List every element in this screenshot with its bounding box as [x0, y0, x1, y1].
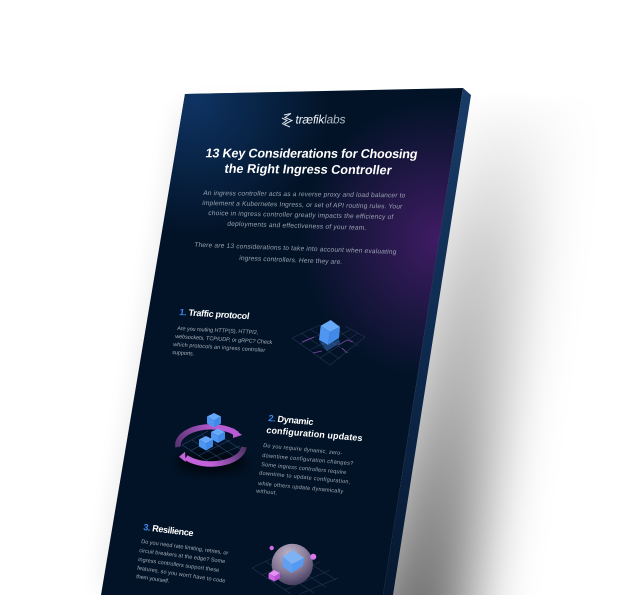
- text 2: while others update dynamically: [257, 481, 344, 495]
- section 1: traffic protocol: [172, 307, 273, 358]
- text 3: ingress controllers support these: [138, 557, 220, 574]
- sphere: [272, 544, 313, 585]
- intro text: deployments and effectiveness of your team.: [227, 221, 367, 232]
- intro text: [194, 190, 406, 266]
- intro text: An ingress controller acts as a reverse proxy and load balancer to: [203, 190, 406, 199]
- heading 2: configuration updates: [266, 425, 363, 443]
- icon: sphere with cube: [252, 544, 338, 594]
- cube in sphere: [283, 550, 304, 573]
- heading 2: 2. Dynamic: [268, 413, 314, 427]
- text 1: websockets, TCP/UDP, or gRPC? Check: [174, 334, 273, 346]
- intro text: choice in ingress controller greatly impacts the efficiency of: [208, 210, 394, 221]
- text 3: circuit breakers at the edge? Some: [139, 548, 226, 565]
- drop shadow: [105, 95, 552, 595]
- cubes: [199, 413, 225, 450]
- text 1: which protocols an ingress controller: [172, 342, 266, 354]
- intro text: ingress controllers. Here they are.: [239, 255, 343, 266]
- text 2: without.: [255, 488, 278, 497]
- text 1: Are you routing HTTP(S), HTTP/2,: [177, 326, 259, 336]
- title: [205, 146, 419, 177]
- infographic book mockup: [101, 88, 556, 595]
- title: the Right Ingress Controller: [224, 162, 393, 177]
- heading 2: [266, 413, 363, 443]
- logo: traefik labs: [282, 112, 347, 127]
- text 2: [255, 443, 354, 497]
- icon: ring of cubes: [176, 413, 248, 475]
- intro text: There are 13 considerations to take into account when evaluating: [194, 242, 397, 256]
- wordmark: træfiklabs: [295, 112, 347, 126]
- title: 13 Key Considerations for Choosing: [205, 146, 419, 161]
- ring arrows: [178, 427, 244, 464]
- text 2: downtime to update configuration,: [259, 471, 351, 486]
- intro text: implement a Kubernetes Ingress, or set of API routing rules. Your: [202, 200, 404, 211]
- text 2: downtime configuration changes?: [262, 453, 354, 467]
- small pink shapes: [268, 546, 316, 582]
- icon: grid with cube: [292, 320, 365, 365]
- text 3: features, so you won't have to code: [137, 566, 226, 585]
- icon: traefik logo: [282, 114, 292, 127]
- section 3: resilience: [136, 522, 229, 585]
- text 1: [172, 326, 273, 358]
- section 2: dynamic configuration updates: [255, 413, 363, 497]
- text 2: Do you require dynamic, zero-: [263, 443, 343, 457]
- cube: [319, 320, 340, 345]
- heading 1: 1. Traffic protocol: [179, 307, 250, 321]
- text 2: Some ingress controllers require: [261, 462, 347, 476]
- panel: front cover: [95, 85, 470, 595]
- heading 3: 3. Resilience: [143, 522, 194, 538]
- text 1: supports.: [172, 350, 195, 358]
- text 3: Do you need rate limiting, retries, or: [141, 539, 229, 557]
- text 3: [136, 539, 229, 585]
- text 3: them yourself.: [136, 574, 170, 585]
- book spine side: [383, 88, 471, 595]
